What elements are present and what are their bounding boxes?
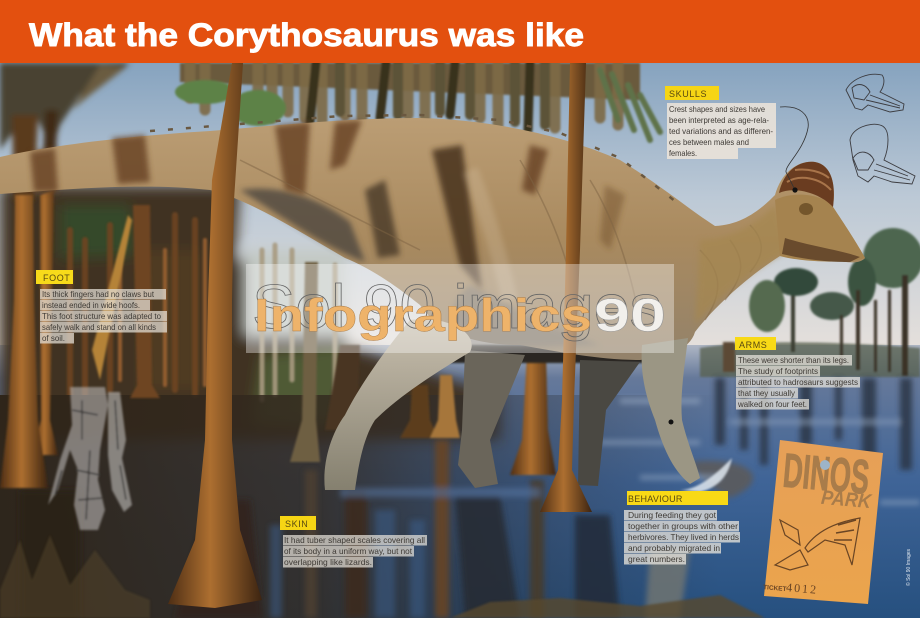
body shadow	[451, 285, 600, 350]
callout: arms: ARMS	[739, 340, 767, 350]
pointer line to crest	[780, 107, 808, 190]
callout: foot: safely walk and stand on all kinds	[42, 322, 156, 332]
callout: foot: Its thick fingers had no claws but	[42, 289, 155, 299]
callout: behaviour: together in groups with other	[628, 521, 738, 531]
callout: foot: FOOT	[43, 273, 70, 283]
left dark water	[0, 395, 720, 618]
callout: arms: that they usually	[738, 388, 796, 398]
central tree	[168, 63, 262, 608]
callout: skin	[280, 516, 427, 568]
callout: behaviour: During feeding they got	[628, 510, 717, 520]
callout: foot: instead ended in wide hoofs.	[42, 300, 140, 310]
callout: skin: overlapping like lizards.	[284, 557, 372, 567]
spine dashes	[150, 115, 680, 205]
callout: behaviour	[624, 491, 740, 564]
callout: skulls: SKULLS	[669, 89, 707, 99]
callout: arms: walked on four feet.	[737, 399, 807, 409]
title bar	[0, 0, 920, 63]
thin tree	[540, 63, 592, 512]
callout: behaviour: BEHAVIOUR	[628, 494, 683, 504]
callout: skulls: been interpreted as age-rela-	[669, 115, 769, 125]
callout: skulls	[665, 86, 808, 193]
callout: behaviour: and probably migrated in	[628, 543, 720, 553]
callout: skin: of its body in a uniform way, but not	[284, 546, 413, 556]
hind leg	[324, 319, 472, 490]
credit: © Sol 90 Images	[905, 548, 912, 586]
water reflections and highlights	[20, 378, 920, 618]
crest	[779, 162, 834, 207]
icon: foot skeleton illustration	[48, 387, 132, 530]
far legs	[458, 350, 525, 488]
callout: behaviour: herbivores. They lived in herds	[628, 532, 739, 542]
ticket: Dinos Park: 4012	[786, 580, 819, 597]
distant forest on the left	[0, 185, 500, 440]
green branch	[175, 80, 286, 126]
ticket: Dinos Park	[763, 440, 883, 604]
callout: behaviour: great numbers.	[628, 554, 685, 564]
callout: skin: It had tuber shaped scales covering all	[284, 535, 425, 545]
neck	[695, 205, 790, 325]
callout: arms: attributed to hadrosaurs suggests	[738, 377, 858, 387]
callout: skin: SKIN	[285, 519, 308, 529]
front leg	[642, 338, 700, 484]
watermark: 90	[594, 289, 666, 341]
stripes	[30, 120, 625, 290]
grass at the bottom	[0, 535, 765, 618]
callout: foot: This foot structure was adapted to	[42, 311, 161, 321]
callout: arms	[735, 337, 860, 410]
callout: skulls: ted variations and as differen-	[669, 126, 773, 136]
watermark: Sol 90 images	[252, 273, 662, 342]
top-left foliage	[0, 63, 130, 200]
callout: skulls: Crest shapes and sizes have	[669, 104, 765, 114]
icon: skull sketches	[846, 74, 915, 184]
splash	[680, 458, 732, 492]
watermark: Infographics	[254, 289, 592, 341]
back trees	[0, 190, 556, 488]
far right trees	[700, 228, 920, 377]
callout: arms: The study of footprints	[738, 366, 818, 376]
title: What the Corythosaurus was like	[29, 17, 584, 53]
callout: foot	[36, 270, 167, 344]
ticket sketch	[775, 518, 860, 570]
ticket: Dinos Park: TICKET	[763, 584, 787, 593]
leg marker	[668, 420, 674, 424]
callout: arms: These were shorter than its legs.	[738, 355, 849, 365]
ticket: Dinos Park: PARK	[820, 487, 873, 513]
callout: skulls: ces between males and	[669, 137, 749, 147]
dinosaur	[0, 115, 865, 490]
dark underside band	[395, 345, 655, 363]
foreground trees	[168, 63, 592, 608]
callout: foot: of soil.	[42, 333, 65, 343]
hanging moss along the top	[180, 63, 660, 140]
skin folds	[240, 160, 761, 320]
head	[775, 195, 865, 262]
callout: skulls: females.	[669, 148, 697, 158]
body	[0, 118, 865, 360]
background tree trunks	[70, 215, 335, 400]
